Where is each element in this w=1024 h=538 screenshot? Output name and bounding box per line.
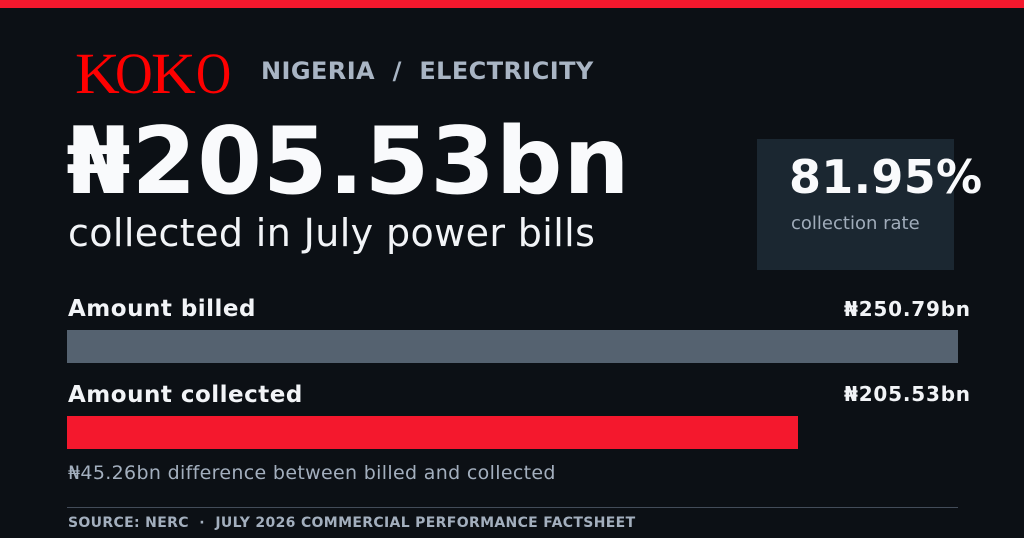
amount billed label: Amount billed (68, 296, 256, 322)
difference note: ₦45.26bn difference between billed and collected (68, 462, 556, 484)
headline figure: ₦205.53bn (66, 107, 630, 215)
amount collected value: ₦205.53bn (844, 382, 971, 406)
logo: KOKO wordmark: O (115, 41, 153, 106)
headline subtitle: collected in July power bills (68, 211, 595, 255)
category label: NIGERIA / ELECTRICITY (261, 57, 594, 85)
amount collected label: Amount collected (68, 382, 303, 408)
bar: amount collected (67, 416, 798, 449)
panel: collection rate (757, 139, 954, 270)
logo: KOKO wordmark: K (75, 41, 120, 106)
amount billed value: ₦250.79bn (844, 297, 971, 321)
top accent bar (0, 0, 1024, 8)
collection rate label: collection rate (791, 213, 920, 234)
logo: KOKO wordmark (75, 41, 231, 106)
logo: KOKO wordmark: O (196, 41, 231, 106)
collection rate value: 81.95% (789, 150, 982, 204)
source line: SOURCE: NERC · JULY 2026 COMMERCIAL PERFORMANCE FACTSHEET (68, 515, 635, 531)
bar: amount billed (67, 330, 958, 363)
logo: KOKO wordmark: K (151, 41, 196, 106)
